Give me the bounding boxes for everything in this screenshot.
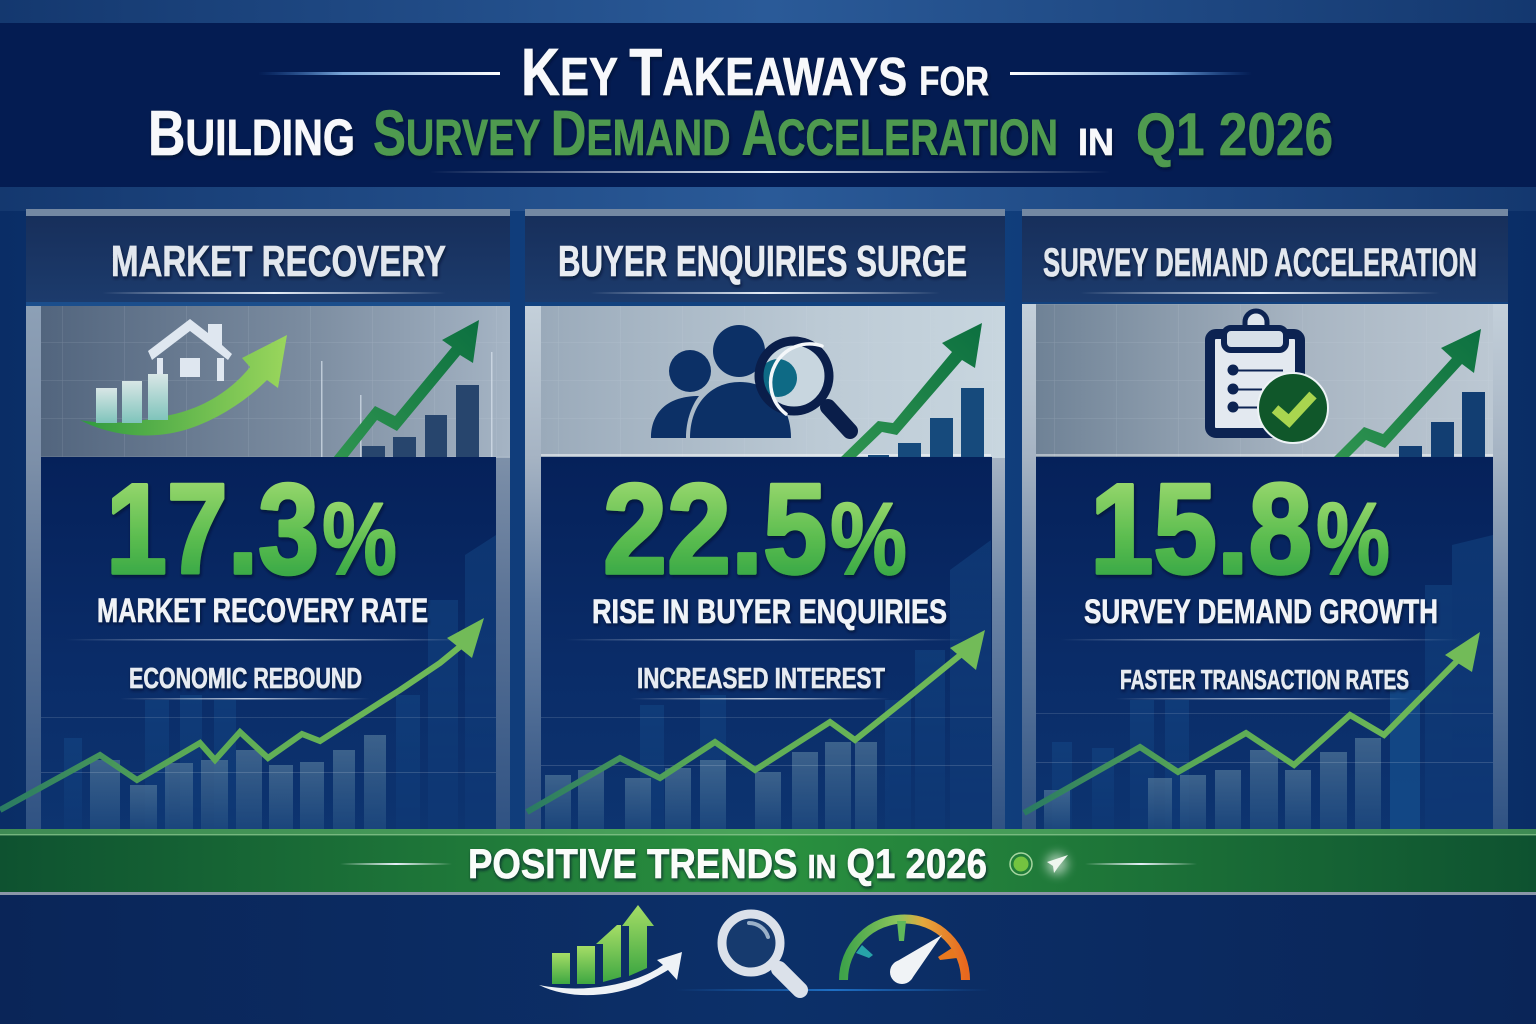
stat value 15.8%: 15.8 [1090, 458, 1312, 601]
stat value 22.5%: 22.5 [603, 458, 827, 601]
banner: positive trends [0, 829, 1536, 895]
stat value 17.3%: % [322, 481, 397, 596]
background bars [1036, 535, 1493, 831]
panel 1 heading bar [26, 216, 510, 302]
title line 2: Q1 2026: Q1 2026 [1136, 101, 1333, 168]
stat label: RISE IN BUYER ENQUIRIES [592, 593, 947, 631]
panel 3 heading bar [1022, 216, 1508, 302]
panel 2 heading bar [525, 216, 1005, 302]
stat label: MARKET RECOVERY RATE [97, 592, 428, 630]
stat value 17.3%: 17.3 [106, 458, 319, 601]
panel 1 dark stat block [41, 457, 496, 831]
background bars [541, 540, 992, 831]
icon: rising chart [840, 323, 984, 458]
banner text: POSITIVE TRENDS IN Q1 2026 [468, 840, 987, 887]
bottom strip [0, 895, 1536, 1024]
icon: sparkle [1046, 853, 1068, 875]
stat value 22.5%: % [830, 481, 907, 596]
icon: clipboard with check [1210, 311, 1328, 443]
panel 1 heading bar: MARKET RECOVERY [111, 237, 446, 286]
title line 1: KEY TAKEAWAYS FOR [521, 35, 989, 110]
panel: market recovery [0, 209, 510, 831]
stat sublabel: FASTER TRANSACTION RATES [1120, 664, 1409, 695]
stat value 15.8%: % [1316, 481, 1390, 596]
panel: survey demand acceleration [1022, 209, 1508, 831]
panel 2 dark stat block [541, 457, 992, 831]
trend line arrow 3 [1024, 632, 1480, 813]
trend line arrow 1 [0, 618, 484, 810]
title line 2: Survey Demand Acceleration: SURVEY DEMAND ACCELERATION [373, 97, 1058, 169]
stat sublabel: ECONOMIC REBOUND [129, 663, 362, 695]
icon: growth bars [539, 905, 682, 995]
panel 2 heading bar: BUYER ENQUIRIES SURGE [558, 237, 967, 286]
icon: rising chart [321, 320, 492, 458]
stat sublabel: INCREASED INTEREST [637, 663, 885, 695]
panel 3 dark stat block [1036, 457, 1493, 831]
background bars [41, 535, 496, 831]
icon: people with magnifier [651, 325, 850, 438]
title banner [0, 23, 1536, 187]
icon: rising chart [1333, 329, 1485, 458]
icon: green dot [1010, 853, 1032, 875]
panel: buyer enquiries surge [525, 209, 1005, 831]
icon: magnifier [722, 914, 800, 990]
title line 2: Building: BUILDING [148, 97, 355, 169]
trend line arrow 2 [527, 630, 985, 812]
icon: gauge [844, 919, 966, 984]
icon: house with bars and arrow [80, 319, 287, 435]
title line 2: in: IN [1078, 122, 1114, 164]
stat label: SURVEY DEMAND GROWTH [1084, 593, 1438, 631]
